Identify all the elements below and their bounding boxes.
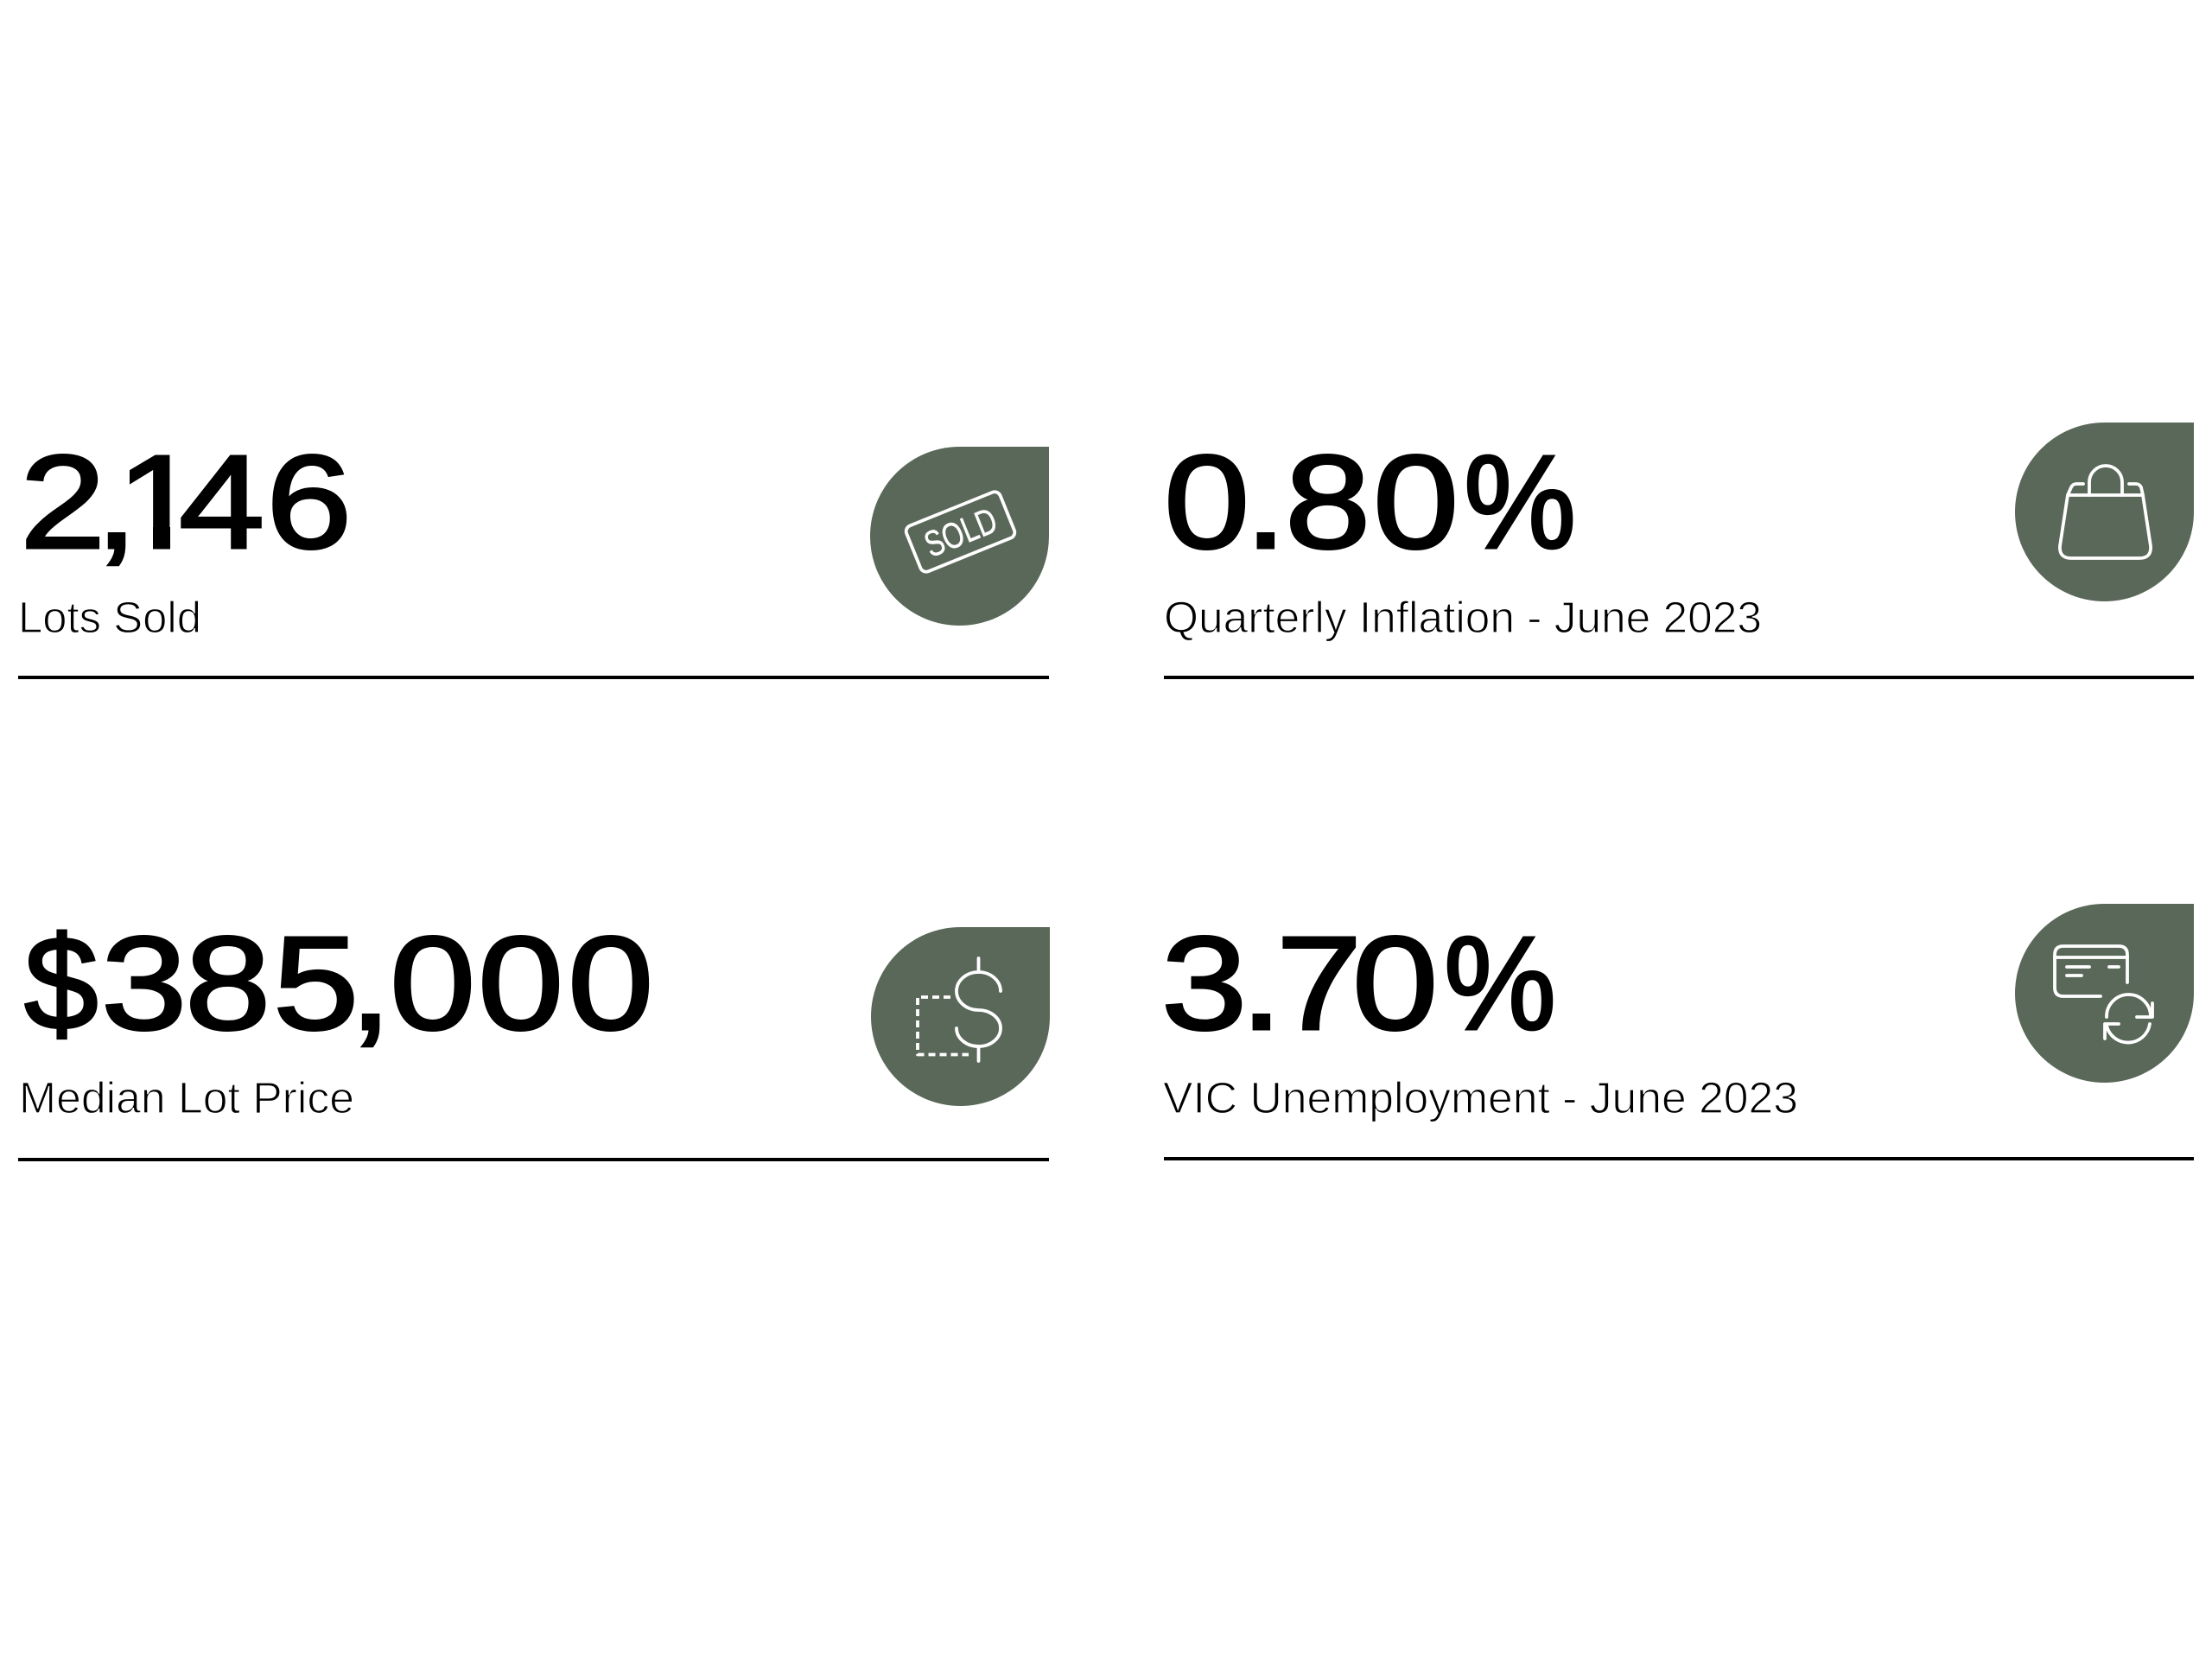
icon: dollar with dashed square <box>871 927 1050 1106</box>
divider line <box>1164 676 2194 679</box>
panel: lots sold <box>18 428 1049 679</box>
label: VIC unemployment: VIC Unemployment - June 2023 <box>1163 1073 1798 1122</box>
panel: VIC unemployment <box>1161 904 2194 1160</box>
divider line <box>1164 1157 2194 1160</box>
infographic canvas <box>18 423 2194 1161</box>
value: 2,146 <box>26 454 347 567</box>
value: 3.70%: % <box>1444 909 1556 1058</box>
divider line <box>18 1158 1049 1161</box>
icon: sold tag: SOLD <box>918 499 1002 565</box>
panel: quarterly inflation <box>1164 423 2194 679</box>
value: 2,146: 1 <box>116 428 201 576</box>
label: median lot price: Median Lot Price <box>19 1073 354 1122</box>
value: 2,146: 46 <box>179 428 352 576</box>
panel: median lot price <box>18 909 1050 1161</box>
value: 3.70%: 3.70 <box>1161 909 1438 1058</box>
value: 0.80%: 0.80 <box>1164 428 1459 576</box>
value: 3.70% <box>1161 909 1556 1058</box>
value: 2,146: 2, <box>20 428 138 576</box>
icon: sold tag <box>870 447 1049 626</box>
label: lots sold: Lots Sold <box>18 593 201 642</box>
icon: shopping bag <box>2015 423 2194 601</box>
icon: card with refresh arrows <box>2015 904 2194 1083</box>
value: $385,000: 385,000 <box>101 909 653 1058</box>
value: 0.80%: % <box>1464 428 1576 576</box>
label: quarterly inflation: Quarterly Inflation - June 2023 <box>1164 593 1762 642</box>
value: $385,000: $ <box>24 909 99 1058</box>
divider line <box>18 676 1049 679</box>
